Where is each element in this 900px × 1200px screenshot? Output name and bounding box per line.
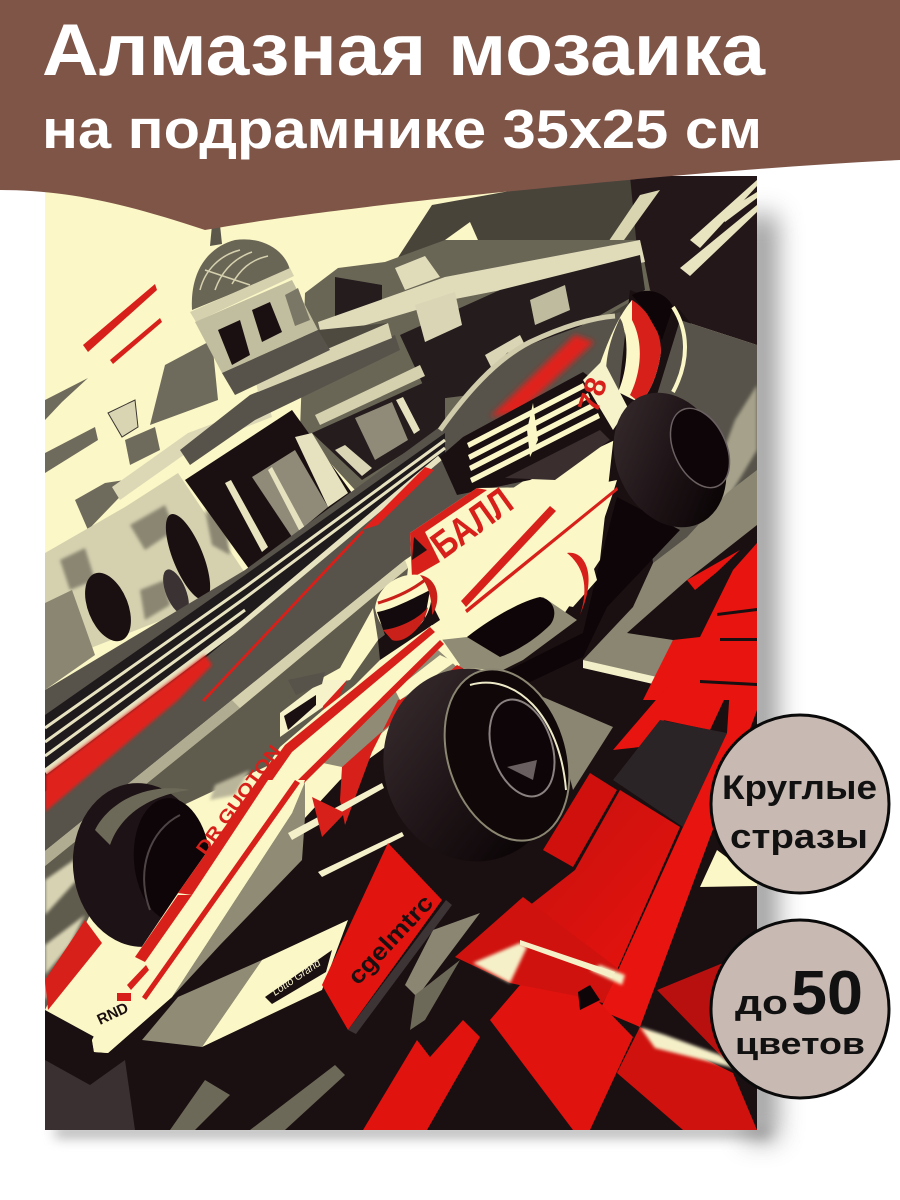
rear wheel [614,392,730,528]
main cream body [604,480,617,518]
front wing [142,920,348,1047]
sky [45,192,757,1036]
helmet [375,575,437,641]
sidepod opening [467,597,554,657]
badge: round rhinestones [711,715,889,893]
rear wing: 78 [572,374,614,416]
track: railing, barrier and road [45,312,640,1010]
suspension arms [288,783,404,877]
nose stripes [268,627,435,780]
front left wheel [72,783,208,947]
racing car [45,360,748,1053]
dome [190,225,330,395]
badge: round rhinestones: Круглые [722,769,877,807]
under-body swoosh [505,497,680,682]
left wing piece [45,920,102,1020]
red endplate: cgelmtrc [343,890,439,990]
nose badges: RND [95,999,131,1029]
left arch wall [45,473,244,648]
back buildings right [300,240,650,490]
badge: up to 50 colours: цветов [735,1026,865,1061]
badge: up to 50 colours: 50 [791,959,863,1028]
diamond painting picture: racing car [45,170,757,1130]
grey verge right of rear wheel [652,320,757,563]
badge: round rhinestones: стразы [730,818,868,856]
red and black geometric foreground [45,543,757,1130]
big front right wheel [384,668,570,861]
red streaks in sky [83,284,157,352]
sponsor lettering on nose: DR GUOTON [192,741,285,858]
nose over left wheel [92,780,305,1053]
rear wing [440,360,628,495]
badge: up to 50 colours: до [735,984,788,1022]
gravel flecks [45,858,76,916]
terrace strips [112,403,272,500]
subtitle: на подрамнике 35х25 см [42,98,762,160]
right wing colonnade [312,373,445,480]
red stripes on body [461,506,556,607]
cockpit surround [323,608,378,681]
engine cover with sponsor logo: БАЛЛ [424,480,521,567]
curved track end and dark ground [45,290,757,1130]
nose body [92,625,460,1053]
drum [195,280,318,373]
track curve [596,300,661,403]
front wing: Lotto Grand [270,957,324,998]
nose badges [95,965,149,1029]
canvas shadow [55,215,777,1140]
title: Алмазная мозаика [42,10,767,91]
grey side of nose [172,782,305,997]
red endplate [322,843,452,1034]
engine cover with sponsor logo [410,487,514,575]
portico [185,410,352,573]
grey skyline blocks [45,378,88,420]
header banner [0,0,900,230]
speed streaks in sky [45,172,757,530]
palace buildings with dome [45,225,650,690]
badge: up to 50 colours [711,920,889,1098]
